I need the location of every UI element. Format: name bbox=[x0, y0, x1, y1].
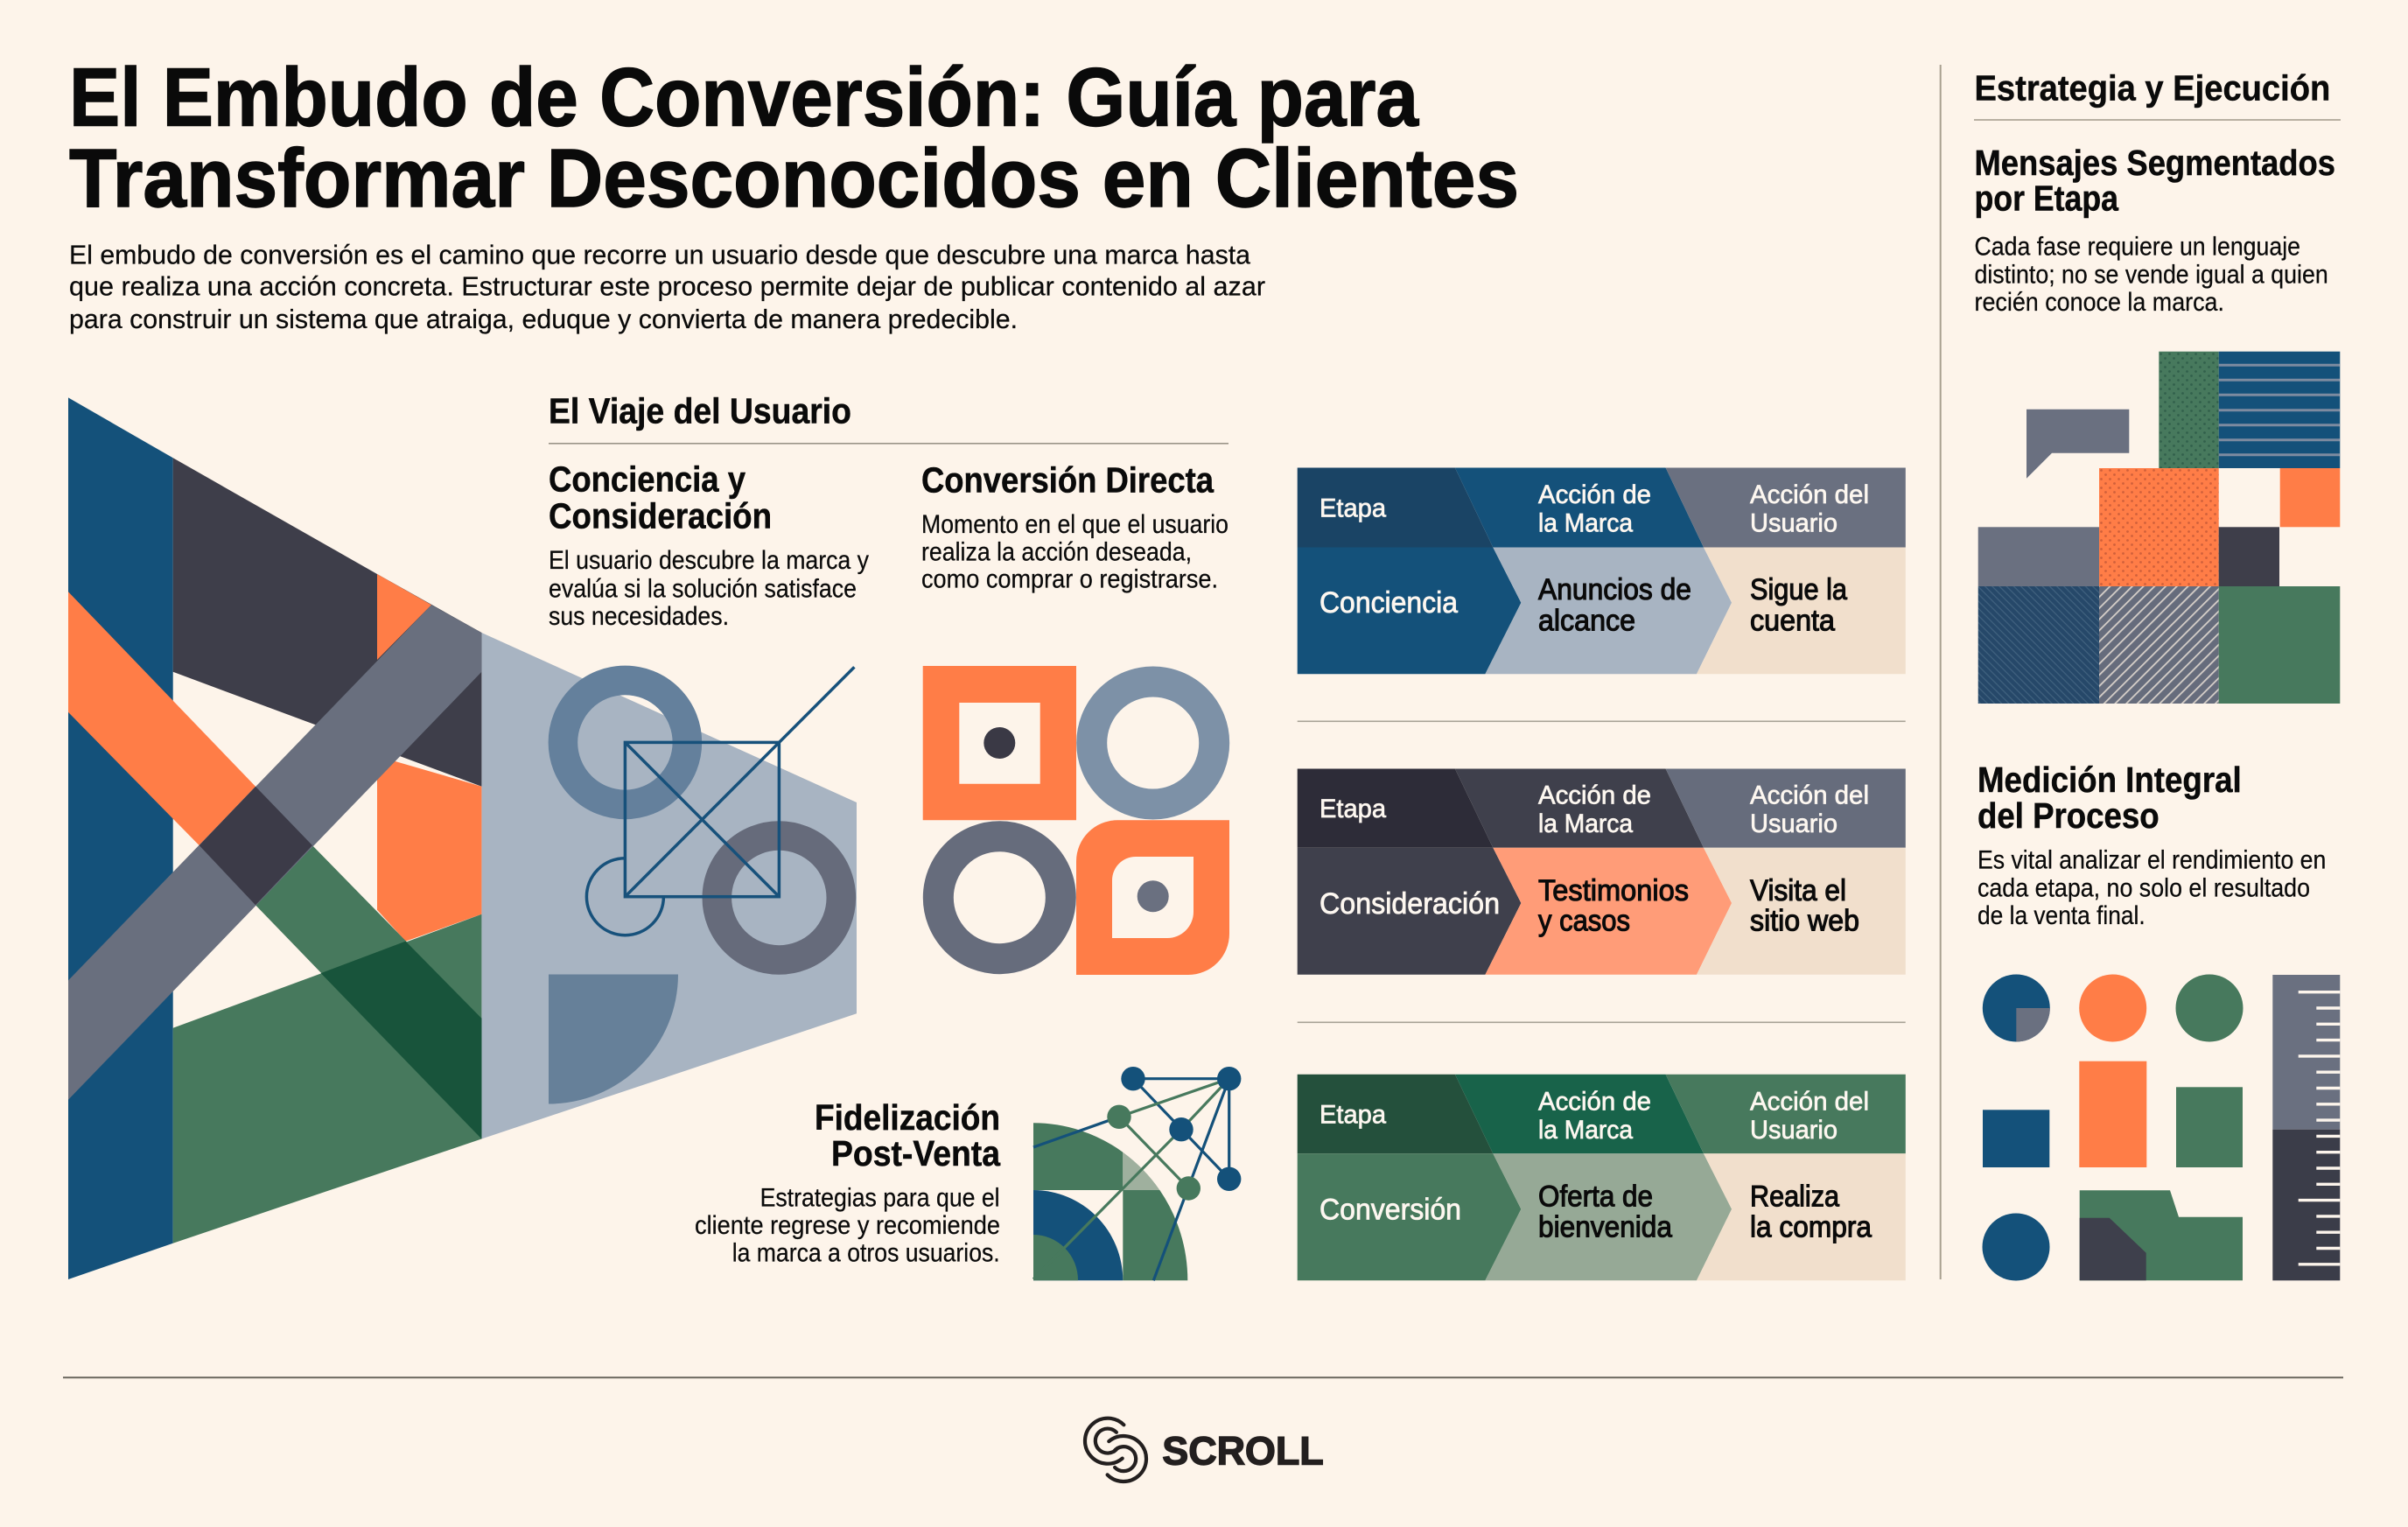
table: Conciencia: Acción de bbox=[1538, 480, 1651, 509]
funnel: orange top piece bbox=[377, 574, 431, 660]
table: Consideración: Acción de bbox=[1538, 781, 1651, 810]
intro paragraph: El embudo de conversión es el camino que recorre un usuario desde que descubre una marca hasta bbox=[69, 240, 1251, 270]
funnel graphic bbox=[68, 397, 857, 1279]
table: Consideración bbox=[1298, 768, 1906, 975]
table: Conciencia: Anuncios de bbox=[1538, 573, 1691, 606]
table: Conciencia bbox=[1298, 467, 1906, 674]
dark block bbox=[2219, 527, 2279, 586]
funnel: dark block bbox=[173, 458, 481, 787]
ring: blue bbox=[563, 680, 687, 804]
table: Consideración: Etapa bbox=[1320, 795, 1386, 823]
text block: Conversión Directa: Conversión Directa bbox=[921, 459, 1214, 500]
green bar bbox=[2176, 1087, 2243, 1167]
line square with diagonals bbox=[586, 667, 854, 935]
section heading: Estrategia y Ejecución: Estrategia y Ejecución bbox=[1974, 67, 2330, 108]
table: Consideración: Visita el bbox=[1750, 874, 1846, 907]
blue circle with grey quadrant bbox=[1983, 975, 2051, 1043]
table: Conciencia: Sigue la bbox=[1750, 573, 1847, 606]
text block: Mensajes Segmentados: por Etapa bbox=[1974, 179, 2119, 219]
funnel: blue band bbox=[68, 397, 173, 1279]
title bbox=[69, 51, 1519, 225]
table: Conversión: la compra bbox=[1750, 1210, 1872, 1243]
table: Conversión: Etapa bbox=[1320, 1100, 1386, 1129]
table: Conversión: Conversión bbox=[1320, 1193, 1461, 1226]
text block: Conciencia y Consideración bbox=[549, 459, 869, 631]
icon: orange leaf frame bbox=[1076, 820, 1229, 975]
text block: Mensajes Segmentados bbox=[1974, 143, 2335, 317]
table: Conversión: la Marca bbox=[1538, 1116, 1633, 1145]
ruler bbox=[2272, 975, 2340, 1280]
table: Conversión: bienvenida bbox=[1538, 1210, 1672, 1243]
icon: network over quarter discs bbox=[1033, 1067, 1241, 1280]
text block: Mensajes Segmentados: distinto; no se vende igual a quien bbox=[1974, 260, 2328, 289]
table: Conciencia: Etapa bbox=[1320, 494, 1386, 522]
quarter circle bbox=[549, 975, 678, 1104]
green circle bbox=[2175, 975, 2244, 1041]
funnel: orange lower block bbox=[377, 756, 481, 942]
funnel: grey diagonal band bbox=[68, 605, 481, 1100]
text block: Medición Integral: de la venta final. bbox=[1978, 901, 2146, 930]
orange dotted block bbox=[2099, 468, 2219, 586]
table: Conciencia: cuenta bbox=[1750, 604, 1835, 637]
text block: Fidelización Post-Venta: Estrategias para que el bbox=[760, 1183, 1000, 1212]
table: Consideración: y casos bbox=[1538, 905, 1630, 938]
table: Consideración: Testimonios bbox=[1538, 874, 1689, 907]
text block: Conversión Directa: realiza la acción deseada, bbox=[921, 538, 1192, 567]
table: Conversión: Acción de bbox=[1538, 1087, 1651, 1116]
table: Conversión: Oferta de bbox=[1538, 1180, 1653, 1213]
network nodes bbox=[1107, 1067, 1241, 1201]
green folder shape bbox=[2080, 1190, 2243, 1280]
text block: Conciencia y Consideración: evalúa si la solución satisface bbox=[549, 574, 857, 603]
text block: Conciencia y Consideración: Conciencia y bbox=[549, 459, 746, 500]
text block: Conversión Directa: como comprar o registrarse. bbox=[921, 565, 1218, 594]
intro paragraph bbox=[69, 240, 1265, 334]
dark folder insert bbox=[2080, 1218, 2146, 1280]
chart: measurement shapes bbox=[1983, 975, 2340, 1281]
intro paragraph: que realiza una acción concreta. Estructurar este proceso permite dejar de publicar contenido al azar bbox=[69, 271, 1265, 302]
funnel: dark crossing bbox=[200, 787, 312, 905]
icon: grey dot bbox=[1138, 880, 1169, 912]
table: Conciencia: la Marca bbox=[1538, 508, 1633, 537]
table: Consideración: Consideración bbox=[1320, 887, 1500, 921]
orange block bbox=[2280, 468, 2340, 527]
table: Conciencia: Usuario bbox=[1750, 508, 1838, 537]
text block: Conversión Directa: Momento en el que el usuario bbox=[921, 510, 1228, 539]
icon: orange square frame bbox=[923, 666, 1076, 820]
table: Conversión: Usuario bbox=[1750, 1116, 1838, 1145]
blue square bbox=[1983, 1110, 2049, 1167]
icon: blue ring bbox=[1092, 682, 1214, 804]
table: Conversión: Realiza bbox=[1750, 1180, 1839, 1213]
table: Consideración: Usuario bbox=[1750, 809, 1838, 838]
text block: Medición Integral bbox=[1978, 760, 2326, 930]
text block: Mensajes Segmentados: Cada fase requiere un lenguaje bbox=[1974, 233, 2300, 262]
funnel: green base bbox=[173, 914, 481, 1243]
text block: Fidelización Post-Venta: Fidelización bbox=[815, 1097, 1000, 1138]
icon: grey ring bbox=[938, 837, 1060, 959]
text block: Fidelización Post-Venta: cliente regrese y recomiende bbox=[695, 1211, 1000, 1240]
ring: grey bbox=[717, 836, 841, 960]
text block: Fidelización Post-Venta: la marca a otros usuarios. bbox=[732, 1239, 1000, 1268]
table: Conversión: Acción del bbox=[1750, 1087, 1869, 1116]
text block: Fidelización Post-Venta: Post-Venta bbox=[831, 1133, 1001, 1173]
text block: Medición Integral: cada etapa, no solo el resultado bbox=[1978, 873, 2310, 902]
icon: dark dot bbox=[984, 727, 1015, 759]
intro paragraph: para construir un sistema que atraiga, eduque y convierta de manera predecible. bbox=[69, 304, 1018, 334]
speech bubble bbox=[2026, 410, 2129, 479]
orange bar bbox=[2079, 1061, 2146, 1167]
green dotted block bbox=[2159, 352, 2219, 468]
chart: segmented blocks bbox=[1978, 352, 2340, 704]
text block: Conciencia y Consideración: Consideración bbox=[549, 495, 772, 536]
title: Transformar Desconocidos en Clientes bbox=[69, 132, 1519, 225]
text block: Medición Integral: Medición Integral bbox=[1978, 760, 2242, 800]
table: Conversión bbox=[1298, 1075, 1906, 1280]
funnel: light end section bbox=[481, 633, 857, 1139]
funnel overlay: rings and square bbox=[549, 667, 854, 1104]
logo mark bbox=[1085, 1418, 1146, 1481]
table: Consideración: Acción del bbox=[1750, 781, 1869, 810]
text block: Conversión Directa bbox=[921, 459, 1228, 594]
orange circle bbox=[2079, 975, 2146, 1041]
funnel: dark green overlap bbox=[321, 942, 481, 1139]
network lines bbox=[1033, 1079, 1229, 1280]
grey hatched block bbox=[2099, 586, 2219, 704]
title: El Embudo de Conversión: Guía para bbox=[69, 51, 1419, 144]
table: Conciencia: Acción del bbox=[1750, 480, 1869, 509]
text block: Fidelización Post-Venta bbox=[695, 1097, 1001, 1268]
table: Consideración: sitio web bbox=[1750, 905, 1859, 938]
text block: Conciencia y Consideración: sus necesidades. bbox=[549, 602, 729, 631]
blue striped block bbox=[2219, 352, 2340, 468]
text block: Medición Integral: Es vital analizar el rendimiento en bbox=[1978, 846, 2326, 875]
quarter disc pieces bbox=[1033, 1123, 1187, 1280]
green block bbox=[2219, 586, 2340, 704]
text block: Mensajes Segmentados: recién conoce la marca. bbox=[1974, 288, 2224, 317]
text block: Mensajes Segmentados: Mensajes Segmentados bbox=[1974, 143, 2335, 183]
footer logo: SCROLL bbox=[1085, 1418, 1324, 1481]
text block: Conciencia y Consideración: El usuario descubre la marca y bbox=[549, 546, 869, 575]
section heading: El Viaje del Usuario: El Viaje del Usuario bbox=[549, 390, 851, 431]
grey block bbox=[1978, 527, 2099, 586]
icon group: conversion shapes bbox=[923, 666, 1229, 975]
table: Conciencia: alcance bbox=[1538, 604, 1635, 637]
navy hatched block bbox=[1978, 586, 2099, 704]
logo wordmark: SCROLL bbox=[1162, 1428, 1324, 1473]
funnel: orange diagonal band bbox=[68, 592, 256, 845]
funnel: green diagonal band bbox=[256, 845, 481, 1139]
table: Conciencia: Conciencia bbox=[1320, 586, 1458, 620]
text block: Medición Integral: del Proceso bbox=[1978, 795, 2160, 836]
table: Consideración: la Marca bbox=[1538, 809, 1633, 838]
blue circle bbox=[1983, 1213, 2049, 1281]
